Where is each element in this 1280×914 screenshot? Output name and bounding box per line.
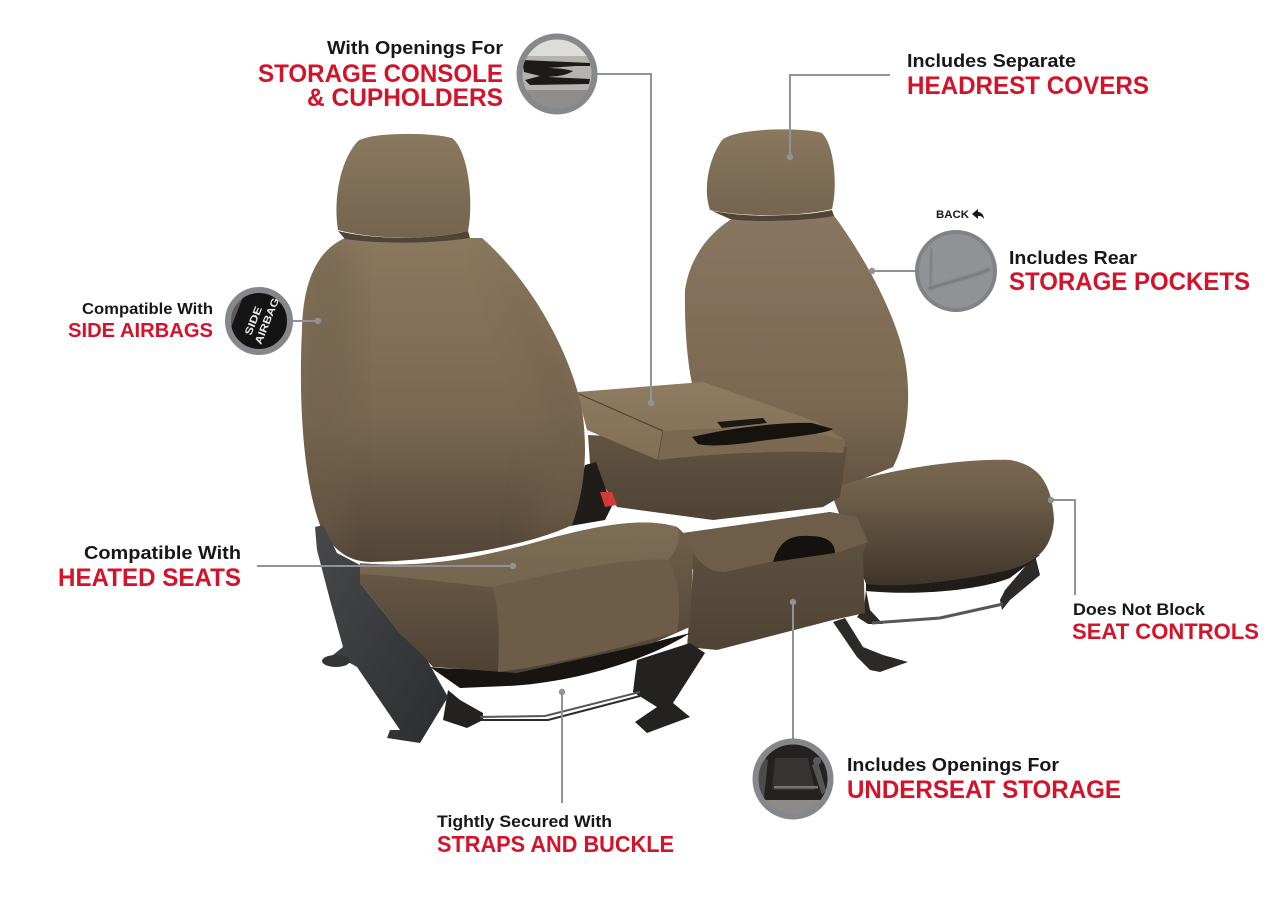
upper console body (588, 435, 847, 520)
label: straps and buckle: STRAPS AND BUCKLE (437, 831, 674, 857)
line: seat controls (1051, 500, 1075, 595)
label: back (936, 209, 984, 221)
right cushion underside (866, 555, 1040, 593)
icon: side airbag closeup: AIRBAG (253, 296, 282, 346)
label: back: BACK (936, 209, 969, 221)
right seat strut (857, 590, 883, 624)
label: storage pockets: Includes Rear (1009, 248, 1137, 268)
lid seam (579, 394, 663, 460)
right headrest (707, 129, 835, 215)
icon: storage pocket closeup (916, 231, 996, 311)
back shading (302, 240, 590, 560)
label: headrest covers: HEADREST COVERS (907, 72, 1149, 100)
right seat (685, 129, 1054, 624)
lid handle (717, 418, 767, 428)
label: storage console (258, 38, 503, 112)
label: storage pockets: STORAGE POCKETS (1009, 268, 1250, 296)
line: headrest (790, 75, 890, 157)
right front leg (633, 643, 705, 733)
side bracket (315, 525, 448, 743)
label: side airbags (68, 301, 213, 342)
label: heated seats (58, 543, 241, 592)
left headrest (336, 134, 470, 238)
line: console (597, 74, 651, 403)
console front legs (833, 618, 908, 672)
seat buckle (570, 462, 617, 526)
left rail chunk (443, 690, 483, 728)
left seat back (301, 238, 585, 562)
label: straps and buckle (437, 812, 674, 857)
label: storage pockets (1009, 248, 1250, 296)
underseat handle (773, 536, 835, 562)
center console (577, 382, 908, 672)
callout lines and dots (257, 74, 1075, 803)
line: straps (561, 692, 563, 803)
left seat cushion (360, 523, 693, 673)
line: airbags (293, 320, 318, 322)
right seat back (685, 213, 908, 490)
callout dots (315, 154, 1054, 695)
cupholders (692, 423, 833, 445)
icon: storage console closeup (517, 34, 597, 114)
label: headrest covers: Includes Separate (907, 51, 1076, 71)
right seat cushion (830, 460, 1054, 585)
icon: side airbag closeup (226, 290, 290, 352)
airbag label: SIDE (243, 305, 265, 337)
upper console front (658, 429, 845, 460)
label: underseat storage (847, 755, 1121, 804)
label: straps and buckle: Tightly Secured With (437, 812, 612, 831)
label: side airbags: Compatible With (82, 301, 213, 318)
upper console lid (577, 382, 845, 460)
console base lid (683, 512, 868, 572)
left cushion top (360, 523, 679, 587)
right seat rail (872, 604, 1003, 623)
left cushion front panel (492, 560, 679, 672)
label: storage console: & CUPHOLDERS (307, 84, 503, 112)
label: seat controls: SEAT CONTROLS (1072, 619, 1259, 644)
rail bar (480, 692, 640, 720)
label: underseat storage: UNDERSEAT STORAGE (847, 776, 1121, 804)
line: pockets (872, 270, 915, 272)
console base box (683, 512, 868, 650)
left headrest collar (338, 231, 470, 243)
line: underseat (792, 602, 794, 740)
bracket foot (322, 655, 350, 667)
label: seat controls: Does Not Block (1073, 600, 1206, 619)
right seat rear leg (1000, 555, 1040, 610)
label: headrest covers (907, 51, 1149, 100)
label: heated seats: HEATED SEATS (58, 564, 241, 592)
label: storage console: STORAGE CONSOLE (258, 60, 503, 88)
line: heated seats (257, 565, 513, 567)
label: heated seats: Compatible With (84, 543, 241, 563)
icon: underseat storage closeup (756, 742, 830, 816)
label: underseat storage: Includes Openings For (847, 755, 1059, 775)
label: side airbags: SIDE AIRBAGS (68, 320, 213, 342)
label: seat controls (1072, 600, 1259, 644)
cushion underside (430, 633, 690, 688)
right headrest collar (712, 210, 834, 221)
left seat (301, 134, 705, 743)
label: storage console: With Openings For (327, 38, 503, 58)
